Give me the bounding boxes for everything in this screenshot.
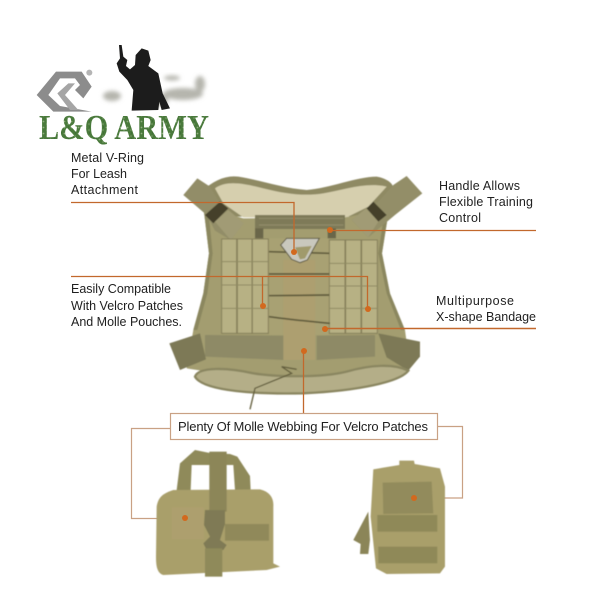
side buckles [169, 333, 206, 370]
center velcro panel [269, 238, 329, 335]
right molle columns [329, 240, 377, 333]
elastic cords [269, 252, 330, 323]
icon: pouch callout dot [182, 515, 188, 521]
icon: soldier silhouette [117, 45, 170, 111]
callout: molle webbing [132, 348, 462, 518]
callout: handle: Flexible Training [439, 195, 533, 209]
left shoulder strap [183, 178, 243, 240]
right shoulder strap [352, 176, 422, 237]
panel: harness vest [169, 176, 422, 409]
callout: handle: Handle Allows [439, 179, 520, 193]
bottom lining [195, 366, 408, 393]
panel: medical pouch [156, 450, 280, 577]
icon: smoke [103, 76, 205, 106]
pouch body [371, 461, 445, 574]
callout: velcro compatibility: Easily Compatible [71, 282, 171, 296]
waist strap [205, 335, 283, 360]
metal V-ring [281, 238, 319, 263]
leader from vest [302, 351, 304, 413]
vest body [187, 202, 410, 383]
callout: velcro compatibility [71, 276, 371, 329]
callout: V-ring: Metal V-Ring [71, 151, 144, 165]
left molle columns [222, 239, 268, 333]
velcro patch [383, 482, 433, 514]
vest lining [202, 176, 393, 217]
logo: L&Q Army [37, 45, 209, 147]
callout: molle webbing: Plenty Of Molle Webbing For Velcro Patches [178, 419, 428, 434]
carry handles [177, 450, 251, 490]
right connector [414, 426, 462, 498]
callout: velcro compatibility: And Molle Pouches. [71, 315, 182, 329]
icon: small pouch callout dot [411, 495, 417, 501]
molle straps [377, 515, 437, 532]
buckle [203, 510, 227, 550]
leader line [71, 276, 368, 309]
leader line [71, 202, 294, 252]
label box [170, 414, 438, 440]
logo wordmark: L&Q ARMY [39, 108, 209, 147]
callout: V-ring: Attachment [71, 183, 139, 197]
callout: X-shape bandage: X-shape Bandage [436, 310, 536, 324]
callout: V-ring [71, 151, 297, 255]
zipper pull [353, 512, 370, 554]
callout: X-shape bandage [322, 294, 536, 332]
leader line [330, 230, 536, 232]
icon: grey Q emblem [37, 70, 92, 112]
drawcord [250, 367, 297, 409]
left connector [132, 428, 185, 518]
callout: velcro compatibility: With Velcro Patches [71, 299, 183, 313]
handle [255, 215, 345, 229]
panel: small molle pouch [353, 461, 445, 574]
velcro patch [172, 507, 204, 539]
pouch body [156, 489, 280, 575]
callout: X-shape bandage: Multipurpose [436, 294, 514, 308]
callout: handle [327, 179, 536, 233]
front strap [209, 452, 227, 512]
callout: handle: Control [439, 211, 481, 225]
leader line [325, 328, 536, 330]
callout: V-ring: For Leash [71, 167, 127, 181]
